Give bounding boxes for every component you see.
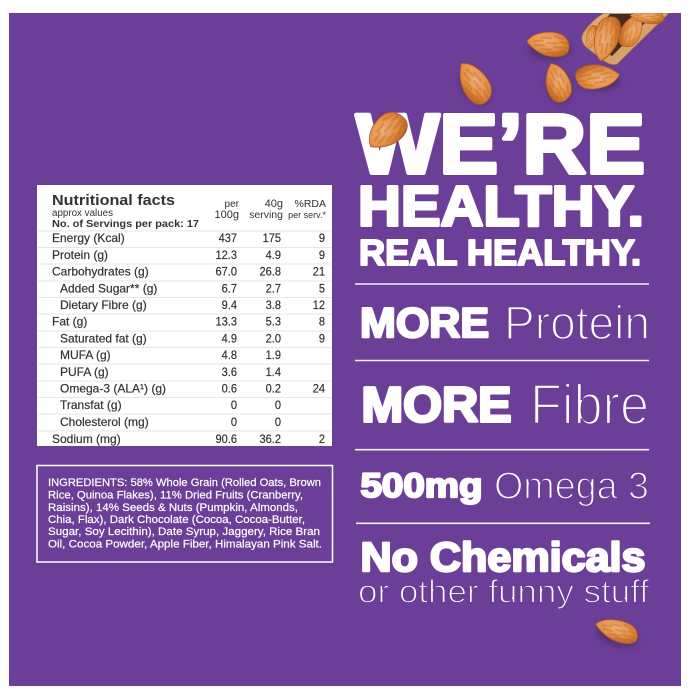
RDA column: 21 — [313, 266, 325, 279]
claim: more protein: MORE — [360, 299, 489, 346]
ingredients box — [37, 466, 332, 562]
per 100g column: 12.3 — [216, 250, 237, 262]
headline: HEALTHY. — [358, 174, 644, 238]
40g serving column: 1.9 — [266, 350, 281, 362]
per 100g column: 9.4 — [222, 300, 238, 312]
per 100g column: 0 — [231, 400, 237, 412]
per 100g column: 4.8 — [222, 350, 237, 362]
per 100g column: 67.0 — [216, 266, 237, 279]
RDA column: 9 — [319, 233, 325, 245]
per 100g column: 4.9 — [222, 333, 237, 346]
nutrient labels: MUFA (g) — [60, 348, 111, 362]
per 100g column: 13.3 — [216, 316, 237, 329]
40g serving column: 175 — [263, 233, 281, 245]
nutrient labels: Dietary Fibre (g) — [60, 298, 147, 312]
icon: almond upper middle — [525, 29, 571, 60]
claim: more fibre — [362, 373, 649, 437]
per 100g column — [216, 233, 238, 446]
RDA column — [313, 233, 326, 446]
RDA column: 8 — [319, 316, 325, 329]
ingredients box: Chia, Flax), Dark Chocolate (Cocoa, Cocoa-Butter, — [48, 514, 305, 526]
ingredients box: Raisins), 14% Seeds & Nuts (Pumpkin, Almonds, — [48, 502, 298, 514]
per 100g column: 437 — [219, 233, 237, 245]
RDA column: 2 — [319, 434, 325, 446]
nutrient labels: Carbohydrates (g) — [52, 264, 149, 278]
claim: more fibre: MORE — [362, 378, 512, 432]
ingredients box: Oil, Cocoa Powder, Apple Fiber, Himalayan Pink Salt. — [48, 538, 322, 550]
claim: no chemicals — [358, 534, 649, 610]
nutrient labels: Sodium (mg) — [52, 432, 121, 446]
column headers: serving — [249, 209, 283, 221]
per 100g column: 3.6 — [222, 367, 237, 379]
per 100g column: 0.6 — [222, 383, 237, 396]
RDA column: 9 — [319, 333, 325, 346]
nutrient labels: Protein (g) — [52, 248, 108, 262]
icon: almonds and wooden scoop — [582, 8, 669, 65]
40g serving column: 2.7 — [266, 283, 281, 296]
40g serving column — [260, 233, 282, 446]
icon: almond in scoop — [618, 17, 642, 48]
nutrient labels: Transfat (g) — [60, 398, 122, 412]
table heading: Nutritional facts — [52, 193, 175, 209]
column headers: %RDA — [294, 198, 326, 210]
40g serving column: 4.9 — [266, 250, 281, 262]
ingredients box: INGREDIENTS: 58% Whole Grain (Rolled Oats, Brown — [48, 477, 321, 489]
headline: WE’RE — [356, 97, 645, 191]
nutrient labels: Saturated fat (g) — [60, 332, 147, 346]
RDA column: 5 — [319, 283, 325, 296]
40g serving column: 3.8 — [266, 300, 281, 312]
column headers — [215, 198, 326, 221]
nutrient labels: Omega-3 (ALA¹) (g) — [60, 382, 166, 396]
icon: almond left — [451, 56, 497, 111]
icon: almond right — [575, 63, 620, 91]
headline: REAL HEALTHY. — [359, 232, 641, 273]
icon: almond in scoop — [594, 16, 621, 62]
nutrient labels — [52, 231, 166, 446]
column headers: 100g — [215, 209, 239, 221]
per 100g column: 90.6 — [216, 434, 237, 446]
40g serving column: 26.8 — [260, 266, 281, 279]
ingredients box: Rice, Quinoa Flakes), 11% Dried Fruits (Cranberry, — [48, 490, 303, 502]
icon: almond bottom — [592, 614, 641, 652]
nutrition table — [37, 185, 332, 446]
40g serving column: 0 — [275, 417, 281, 429]
RDA column: 9 — [319, 250, 325, 262]
nutrient labels: Energy (Kcal) — [52, 231, 125, 245]
nutrient labels: Added Sugar** (g) — [60, 282, 157, 296]
nutrient labels: PUFA (g) — [60, 365, 109, 379]
nutrient labels: Fat (g) — [52, 314, 87, 328]
ingredients box: Sugar, Soy Lecithin), Date Syrup, Jaggery, Rice Bran — [48, 526, 320, 538]
RDA column: 24 — [313, 383, 326, 396]
claim: no chemicals: No Chemicals — [360, 534, 646, 580]
40g serving column: 0.2 — [266, 383, 281, 396]
column headers: per — [225, 199, 240, 210]
claim: more protein — [360, 297, 650, 350]
headline — [356, 97, 645, 273]
icon: almond centre — [540, 60, 575, 107]
40g serving column: 0 — [275, 400, 281, 412]
column headers: 40g — [265, 198, 283, 210]
40g serving column: 36.2 — [260, 434, 281, 446]
per 100g column: 0 — [231, 417, 237, 429]
claim: 500mg omega 3: Omega 3 — [494, 466, 649, 508]
claim: 500mg omega 3: 500mg — [360, 467, 482, 505]
claim: 500mg omega 3 — [360, 466, 649, 508]
column headers: per serv.* — [288, 210, 326, 220]
40g serving column: 1.4 — [266, 367, 282, 379]
claim: no chemicals: or other funny stuff — [358, 574, 649, 610]
icon: almond on headline — [360, 106, 413, 157]
per 100g column: 6.7 — [222, 283, 237, 296]
40g serving column: 2.0 — [266, 333, 281, 346]
RDA column: 12 — [313, 300, 325, 312]
table heading: No. of Servings per pack: 17 — [52, 218, 199, 230]
claim: more protein: Protein — [504, 297, 650, 350]
40g serving column: 5.3 — [266, 316, 281, 329]
icon: almond in scoop — [630, 13, 664, 24]
nutrient labels: Cholesterol (mg) — [60, 415, 149, 429]
claim: more fibre: Fibre — [530, 373, 649, 437]
table heading: approx values — [52, 208, 113, 219]
divider lines — [355, 284, 650, 523]
icon: wooden scoop — [582, 13, 669, 65]
icon: almond in scoop — [586, 25, 597, 49]
table heading — [52, 193, 199, 230]
